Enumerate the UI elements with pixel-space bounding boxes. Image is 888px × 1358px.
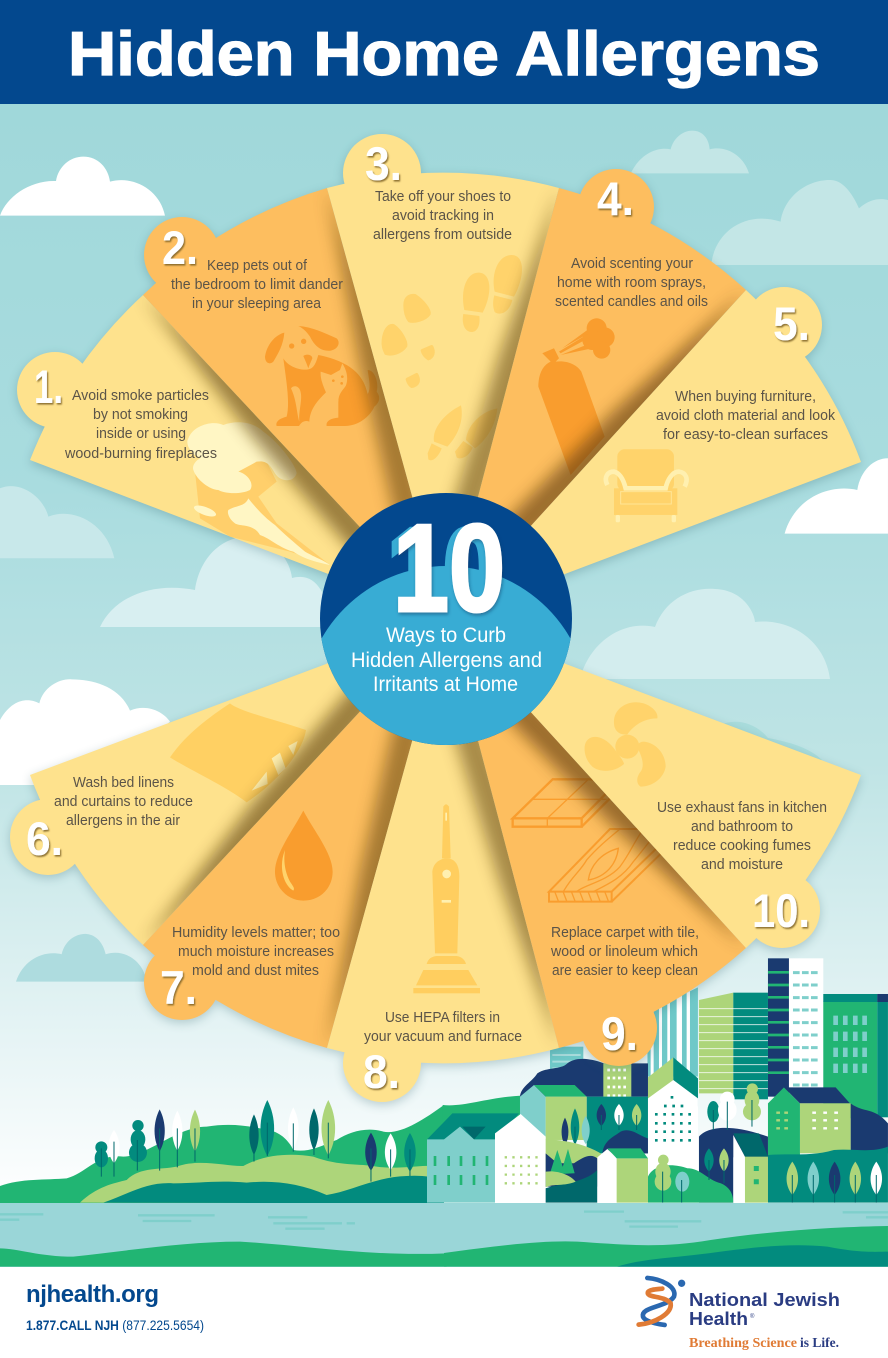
tip 3 text [373,188,512,243]
website: njhealth.org [26,1281,159,1308]
icon: smoke [187,422,330,565]
icon: vacuum [413,804,480,993]
icon: tile and wood planks [504,712,741,944]
tip 5 text [656,388,835,443]
city skyline [427,958,888,1203]
number 6: 6. [26,812,63,865]
tip 7 text: much moisture increases [178,943,334,960]
tip 3 text: avoid tracking in [392,207,494,224]
tip 1 text: inside or using [96,425,186,442]
tip 2 text: in your sleeping area [192,295,322,312]
tip 5 text: When buying furniture, [675,388,816,405]
tip 3 text: Take off your shoes to [375,188,511,205]
icon: spray can [538,318,615,475]
number 9: 9. [601,1007,638,1060]
tip 7 text: mold and dust mites [192,962,319,979]
panel: tip 6 linens [10,663,360,945]
tip 10 text: reduce cooking fumes [673,837,811,854]
logo name [689,1290,840,1329]
panel: tip 5 furniture [446,287,861,619]
tip 10 text: and bathroom to [691,818,793,835]
tip 8 text: your vacuum and furnace [364,1028,522,1045]
clouds [0,131,888,982]
number 7: 7. [160,961,197,1014]
tip 8 text [364,1009,522,1045]
center caption [351,624,542,696]
icon: armchair [606,449,687,522]
logo mark [639,1278,685,1325]
tip 10 text: and moisture [701,856,783,873]
icon: water drop [275,811,333,901]
tip 6 text: and curtains to reduce [54,793,193,810]
number 8: 8. [363,1045,400,1098]
title: Hidden Home Allergens [68,20,820,89]
tip 4 text: home with room sprays, [557,274,706,291]
tip 6 text [54,774,193,829]
tip 5 text: avoid cloth material and look [656,407,835,424]
tip 2 text [171,257,343,312]
tip 1 text: by not smoking [93,406,188,423]
title banner [0,0,888,104]
panel: tip 10 exhaust fan [446,619,861,948]
center circle [320,493,572,745]
center caption: Irritants at Home [373,673,518,696]
tip 1 text: wood-burning fireplaces [64,445,217,462]
tip 4 text: Avoid scenting your [571,255,693,272]
panel: tip 2 pets [143,188,412,527]
panel: tip 1 smoke [17,295,360,574]
number 5: 5. [773,297,810,350]
number 3: 3. [365,137,402,190]
tip 1 text: Avoid smoke particles [72,387,209,404]
tip 1 text [64,387,217,462]
left hills and trees [0,1100,444,1203]
tip 5 text: for easy-to-clean surfaces [663,426,828,443]
icon: fan [585,702,666,787]
tip 4 text [555,255,708,310]
footer [0,1267,888,1358]
tip 9 text [550,924,699,979]
logo name: National Jewish [689,1290,840,1310]
tip 9 text: Replace carpet with tile, [551,924,699,941]
tip 9 text: are easier to keep clean [552,962,698,979]
tip 8 text: Use HEPA filters in [385,1009,500,1026]
panel: tip 8 vacuum [327,740,559,1102]
tip 6 text: allergens in the air [66,812,180,829]
tip 2 text: the bedroom to limit dander [171,276,343,293]
center caption: Hidden Allergens and [351,649,542,672]
big number 10: 10 [386,503,498,641]
panel: tip 3 shoes [327,134,559,498]
number 1: 1. [34,360,63,413]
tip 3 text: allergens from outside [373,226,512,243]
tip 2 text: Keep pets out of [207,257,308,274]
phone: 1.877.CALL NJH (877.225.5654) [26,1318,204,1333]
river and foreground [0,1203,888,1267]
icon: pillow [170,703,306,802]
logo tagline: Breathing Science [689,1336,797,1351]
number 4: 4. [597,172,634,225]
tip 6 text: Wash bed linens [73,774,174,791]
tip 10 text [657,799,827,873]
logo name: ® [750,1313,755,1320]
icon: shoe prints [383,255,522,460]
big number 10: 10 [393,500,505,638]
number 10: 10. [752,884,810,937]
logo name: Health [689,1309,748,1329]
fan soft shadow [10,137,861,1105]
number 2: 2. [162,221,198,274]
tip 4 text: scented candles and oils [555,293,708,310]
panel: tip 9 flooring [478,712,746,1066]
logo [639,1278,840,1351]
tip 9 text: wood or linoleum which [550,943,698,960]
logo tagline: is Life. [800,1336,839,1351]
panel: tip 4 spray [478,169,746,526]
panel: tip 7 humidity [143,712,412,1048]
tip 7 text [172,924,340,979]
icon: dog and cat [265,326,379,426]
tip 7 text: Humidity levels matter; too [172,924,340,941]
center caption: Ways to Curb [386,624,506,647]
tip 10 text: Use exhaust fans in kitchen [657,799,827,816]
